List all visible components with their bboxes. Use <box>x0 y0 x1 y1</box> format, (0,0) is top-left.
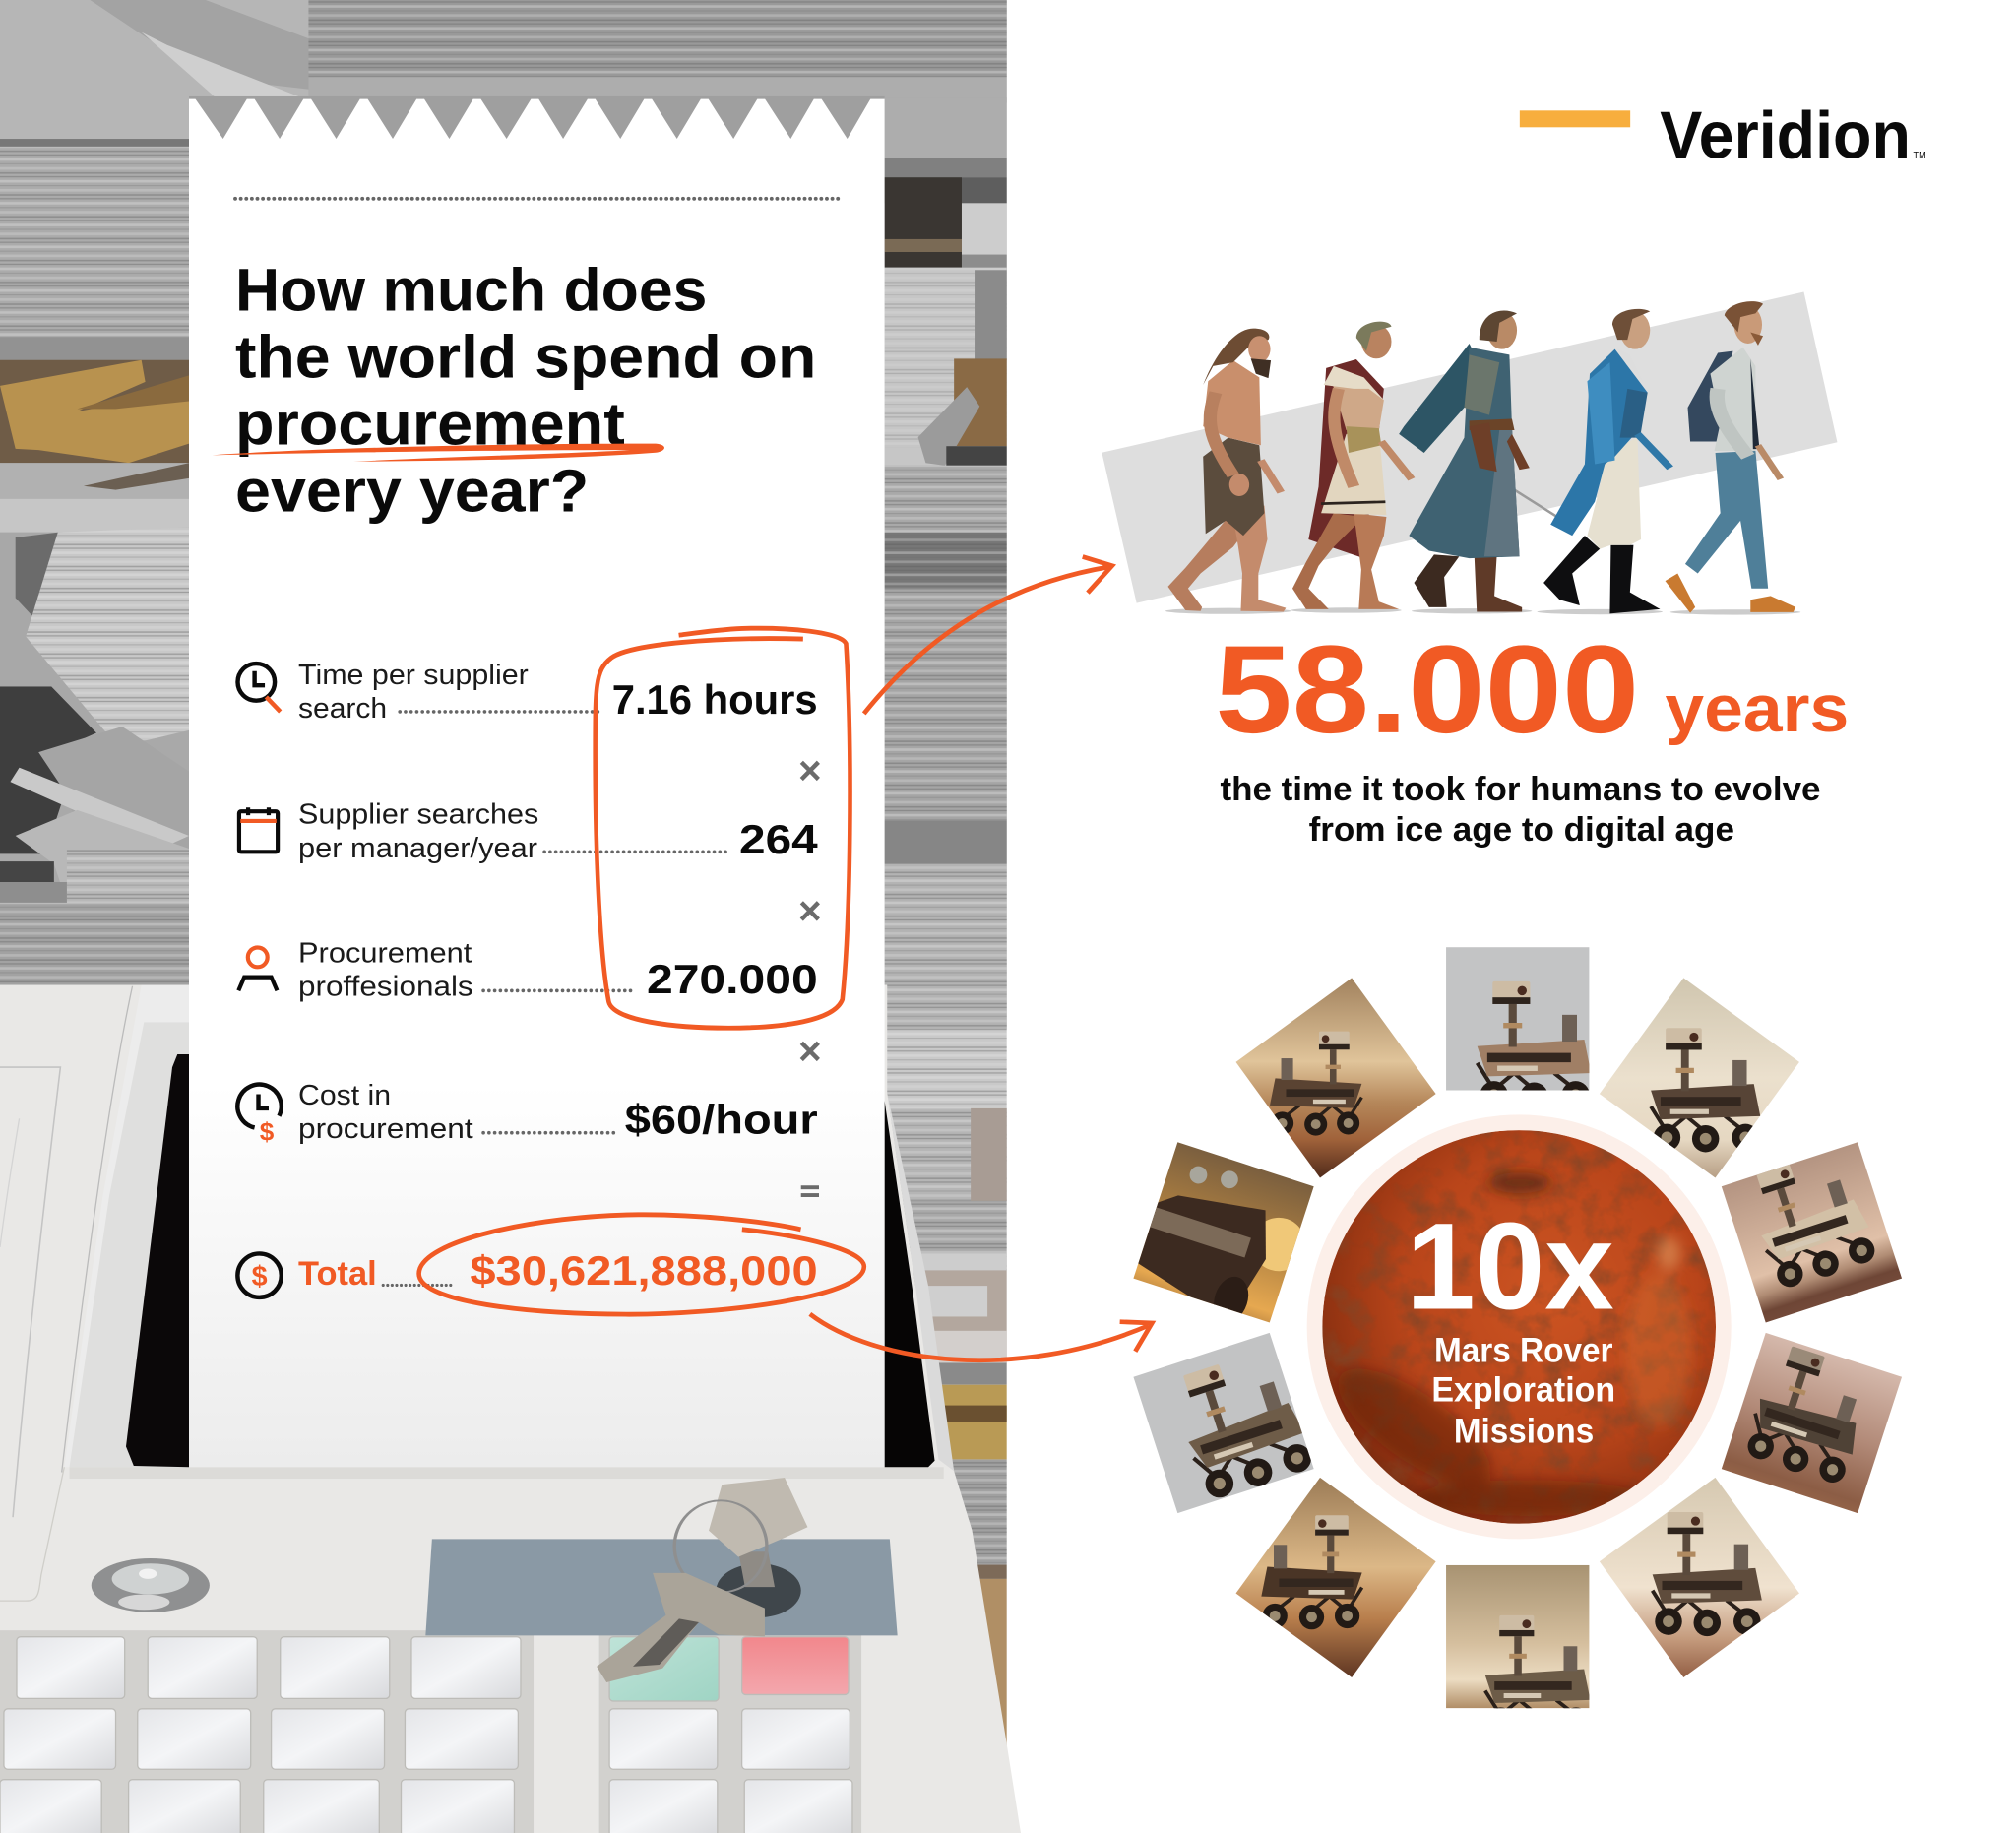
photo: rover upper left <box>1232 975 1439 1181</box>
icon: clock with dollar <box>237 1085 282 1147</box>
multiply sign 3: × <box>798 1028 822 1073</box>
heading <box>235 256 816 526</box>
photo: rover lower left <box>1232 1475 1439 1680</box>
register slot highlight <box>887 1093 954 1471</box>
photo: sunset rover <box>1134 1142 1314 1323</box>
multiply sign 2: × <box>798 888 822 933</box>
background: paper stacks photo <box>0 0 1007 1833</box>
row: cost in procurement: $60/hour <box>625 1096 818 1142</box>
photo: cash register <box>0 984 1021 1833</box>
row: procurement professionals <box>238 938 818 1003</box>
ring of mars rover photos <box>1134 947 1902 1709</box>
row: supplier searches: Supplier searches <box>298 799 538 831</box>
stat: 58.000 years: years <box>1665 672 1849 746</box>
hand-drawn loop around total <box>419 1215 864 1314</box>
figure: roman soldier <box>1291 322 1412 613</box>
photo: rover left lower <box>1134 1333 1313 1513</box>
row: cost in procurement: Cost in <box>298 1080 391 1111</box>
planet mars with stat: Exploration <box>1431 1371 1615 1410</box>
photo: rover upper right <box>1597 975 1802 1181</box>
figure: victorian gentleman <box>1537 309 1670 614</box>
caption: evolution: from ice age to digital age <box>1309 811 1734 849</box>
stat: 58.000 years <box>1215 619 1849 759</box>
arrow to mars missions <box>810 1314 1152 1360</box>
icon: calendar <box>239 807 278 852</box>
round lock button <box>92 1558 210 1612</box>
logo: Veridion <box>1520 99 1926 173</box>
row: procurement professionals: proffesionals <box>298 972 473 1003</box>
stat: 58.000 years: 58.000 <box>1215 619 1639 759</box>
steel plate and keyhole <box>425 1539 898 1635</box>
photo: rover bottom <box>1446 1565 1589 1709</box>
planet mars with stat <box>1307 1114 1732 1539</box>
icon: dollar coin <box>237 1253 282 1297</box>
photo: rover right lower <box>1721 1333 1902 1514</box>
key block shadows <box>0 1630 861 1833</box>
planet mars with stat: Mars Rover <box>1434 1332 1613 1370</box>
register keys <box>0 1630 861 1833</box>
icon: dollar coin: $ <box>252 1261 268 1293</box>
equals sign <box>801 1185 819 1197</box>
row: total: Total <box>298 1255 377 1293</box>
hand-drawn loop around factors <box>596 628 850 1028</box>
row: procurement professionals: Procurement <box>298 938 472 970</box>
row: supplier searches <box>239 799 819 864</box>
black paper slot left <box>126 1054 189 1467</box>
photo: rover lower right <box>1597 1475 1802 1680</box>
caption: evolution: the time it took for humans to evolve <box>1221 771 1820 808</box>
heading: procurement <box>235 391 625 459</box>
row: total: $30,621,888,000 <box>470 1247 818 1294</box>
photo: rover right upper <box>1721 1142 1902 1323</box>
row: total <box>237 1247 818 1297</box>
row: time per supplier search: Time per supplier <box>298 660 529 691</box>
figure: caveman <box>1166 329 1291 614</box>
heading: every year? <box>235 458 589 526</box>
icon: clock with dollar: $ <box>260 1117 275 1147</box>
logo: Veridion: Veridion <box>1660 99 1911 173</box>
row: supplier searches: 264 <box>739 816 819 862</box>
logo: Veridion: TM <box>1914 151 1926 160</box>
planet mars with stat: 10x <box>1406 1197 1614 1336</box>
black paper slot right <box>885 1101 935 1467</box>
multiply sign 1: × <box>798 748 822 793</box>
row: procurement professionals: 270.000 <box>647 956 818 1002</box>
scribble underline <box>213 444 664 462</box>
icon: person <box>238 947 277 990</box>
row: cost in procurement: procurement <box>298 1113 473 1145</box>
keys on a ring <box>597 1478 807 1682</box>
row: time per supplier search <box>238 660 818 725</box>
heading: How much does <box>235 256 707 324</box>
figure: modern man with backpack <box>1666 301 1800 615</box>
illustration: human evolution figures <box>1166 301 1800 615</box>
photo: rover top <box>1446 947 1589 1091</box>
row: time per supplier search: search <box>298 693 387 725</box>
figure: medieval traveller <box>1399 310 1557 613</box>
gray banner behind figures <box>1102 291 1837 603</box>
caption: evolution <box>1221 771 1820 849</box>
planet mars with stat: Missions <box>1454 1412 1594 1450</box>
planet disc <box>1321 1130 1717 1524</box>
row: cost in procurement <box>237 1080 818 1147</box>
row: supplier searches: per manager/year <box>298 833 537 864</box>
icon: clock with magnifier <box>238 664 281 712</box>
halo ring <box>1307 1114 1732 1539</box>
arrow to evolution figures <box>864 557 1112 714</box>
panel: receipt <box>189 99 885 1467</box>
heading: the world spend on <box>235 324 816 392</box>
row: time per supplier search: 7.16 hours <box>612 676 818 723</box>
